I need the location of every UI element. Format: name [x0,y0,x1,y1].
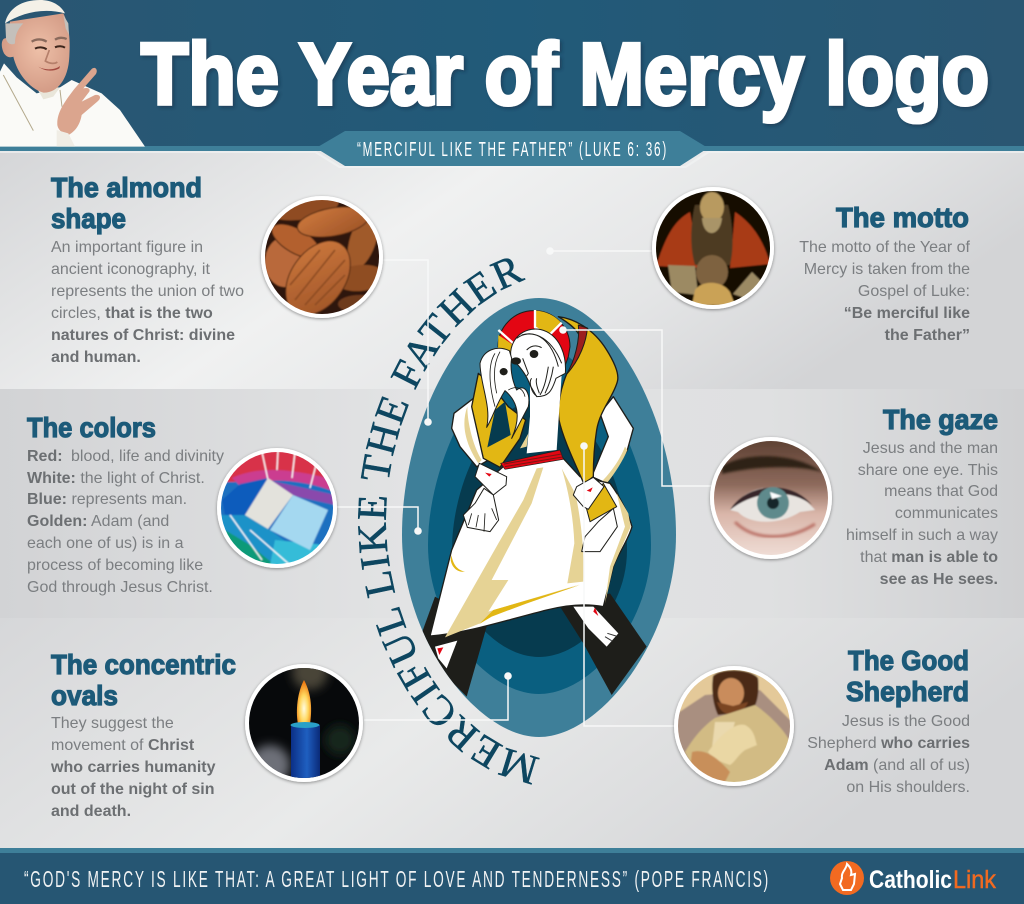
section: the colors [27,412,224,596]
background [0,150,1024,850]
photo: prodigal son painting [650,187,775,310]
outer oval [402,298,676,737]
section: the concentric ovals: They suggest the [51,715,174,732]
chest [527,375,562,453]
section: the concentric ovals: movement of Christ [51,737,195,754]
connector lines [336,247,711,726]
robe folds [445,467,580,637]
section: the motto: “Be merciful like [844,305,970,322]
section: the gaze: The gaze [883,404,998,435]
section: the concentric ovals: who carries humanity [50,759,216,776]
section: the concentric ovals: out of the night of sin [51,781,215,798]
Adam head [480,348,529,438]
section: the gaze: Jesus and the man [863,440,998,457]
header band [0,0,1024,151]
arms [452,393,633,483]
section: the almond shape: shape [51,203,126,234]
section: the almond shape: circles, that is the two [51,305,213,322]
section: the almond shape: represents the union of two [51,283,244,300]
belt [501,450,563,469]
section: the almond shape: and human. [51,349,141,366]
inner oval [452,400,627,657]
photo: Good Shepherd painting [674,666,795,790]
section: the colors: The colors [27,412,156,443]
photo: almonds [260,191,387,327]
section: the gaze: communicates [895,505,998,522]
section: the almond shape: natures of Christ: divine [51,327,235,344]
section: the Good Shepherd: Shepherd [846,676,969,707]
halo [498,311,570,365]
section: the almond shape: The almond [51,172,202,203]
section: the colors: process of becoming like [27,557,203,574]
section: the motto: The motto [836,202,969,233]
section: the colors: White: the light of Christ. [27,470,205,487]
section: the motto: Mercy is taken from the [804,261,970,278]
section: the concentric ovals: The concentric [51,649,236,680]
section: the gaze: see as He sees. [880,571,998,588]
section: the motto: the Father” [885,327,970,344]
CatholicLink logo: Link [953,866,996,894]
section: the almond shape [51,172,244,366]
CatholicLink logo: Catholic [869,866,952,894]
CatholicLink logo [830,861,996,895]
section: the Good Shepherd: Shepherd who carries [807,735,970,752]
section: the gaze: himself in such a way [846,527,998,544]
section: the colors: Red: blood, life and divinity [27,448,224,465]
section: the colors: Golden: Adam (and [27,513,169,530]
section: the motto: Gospel of Luke: [858,283,970,300]
photo: eye [710,437,832,559]
curved motto around the logo: MERCIFUL LIKE THE FATHER [358,258,540,785]
gold mantle [558,317,618,484]
photo: Pope Francis [0,0,145,147]
figure of Christ carrying Adam [430,310,633,647]
subtitle ribbon: “MERCIFUL LIKE THE FATHER” (LUKE 6: 36) [357,139,668,161]
section: the concentric ovals: ovals [51,680,118,711]
section: the Good Shepherd: Jesus is the Good [842,713,970,730]
robe [430,457,632,636]
section: the concentric ovals: and death. [51,803,131,820]
photo: colour swatches and brush [217,448,337,568]
photo: blue candle [245,654,365,785]
section: the colors: Blue: represents man. [27,491,187,508]
section: the colors: God through Jesus Christ. [27,579,213,596]
section: the gaze: that man is able to [860,549,998,566]
section: the colors: each one of us) is in a [27,535,184,552]
middle oval [428,345,651,694]
section: the gaze: share one eye. This [858,462,998,479]
section: the Good Shepherd [807,645,970,796]
section: the gaze [846,404,998,588]
section: the almond shape: An important figure in [51,239,203,256]
footer band [0,848,1024,904]
section: the Good Shepherd: The Good [848,645,969,676]
section: the concentric ovals [50,649,236,820]
section: the Good Shepherd: on His shoulders. [846,779,970,796]
logo: concentric ovals and figure [402,298,676,737]
hands and foot [475,463,507,495]
section: the gaze: means that God [884,483,998,500]
section: the almond shape: ancient iconography, it [51,261,210,278]
section: the motto [799,202,971,344]
section: the Good Shepherd: Adam (and all of us) [824,757,970,774]
section: the motto: The motto of the Year of [799,239,971,256]
legs [422,593,647,697]
Christ head [511,329,565,397]
subtitle ribbon [0,131,1024,168]
